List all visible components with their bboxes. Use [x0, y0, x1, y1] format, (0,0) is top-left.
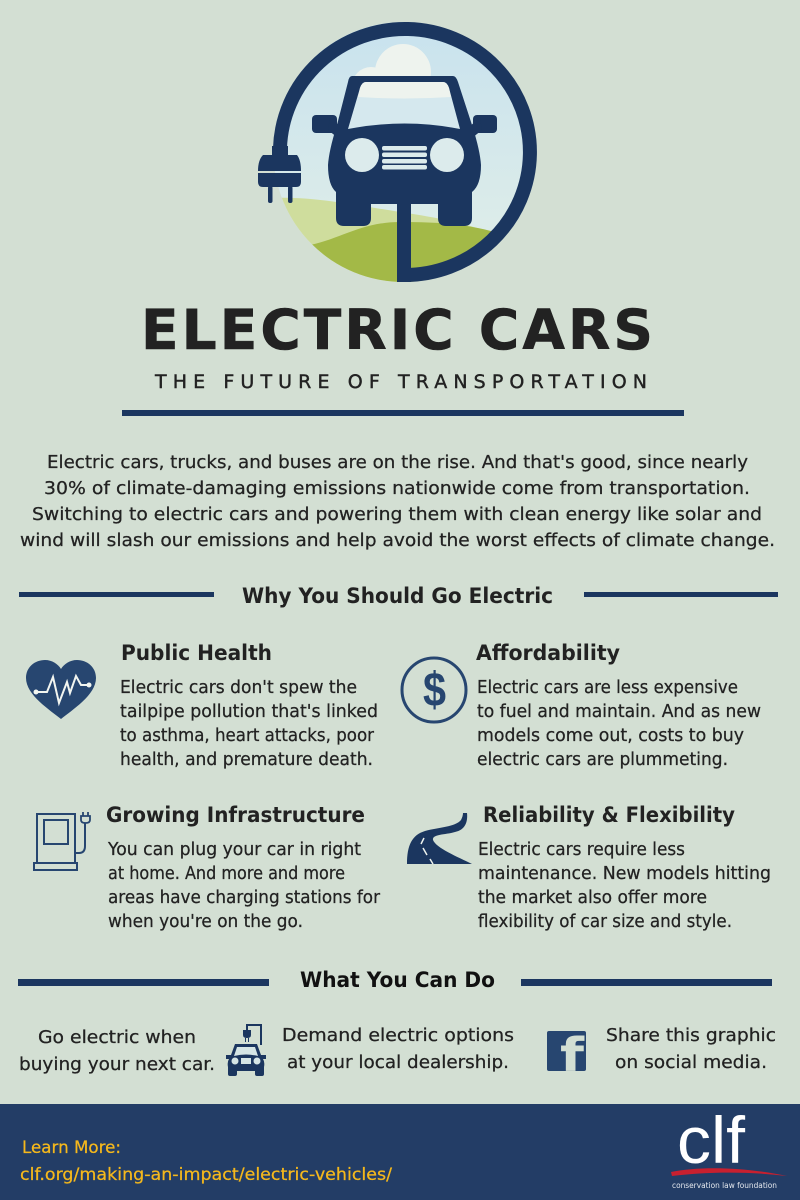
body text: models come out, costs to buy: [477, 726, 744, 746]
icon: car with charger: [226, 1025, 266, 1076]
link: clf.org/making-an-impact/electric-vehicles/: [20, 1165, 392, 1185]
action: share: Share this graphic: [606, 1026, 776, 1046]
intro paragraph: Switching to electric cars and powering them with clean energy like solar and: [32, 504, 762, 525]
body text: [107, 840, 381, 932]
intro paragraph: Electric cars, trucks, and buses are on the rise. And that's good, since nearly: [47, 452, 748, 473]
footer: [0, 1103, 800, 1200]
icon: heart with pulse: [26, 660, 96, 719]
body text: [477, 678, 761, 770]
action: go electric: buying your next car.: [19, 1055, 215, 1075]
panel: public health: [26, 641, 378, 770]
body text: when you're on the go.: [108, 912, 303, 932]
panel: growing infrastructure: [34, 803, 381, 932]
subtitle: THE FUTURE OF TRANSPORTATION: [154, 371, 647, 393]
icon: charging station: [34, 812, 90, 870]
cloud: [355, 44, 431, 76]
plug: [258, 146, 301, 203]
panel: affordability: [402, 641, 761, 770]
heading: Public Health: [121, 641, 272, 665]
heading: why you should go electric: Why You Should Go Electric: [242, 584, 553, 608]
intro paragraph: 30% of climate-damaging emissions nationwide come from transportation.: [44, 478, 750, 499]
heading: what you can do: What You Can Do: [300, 968, 495, 992]
heading: Affordability: [476, 641, 620, 665]
heading: Reliability & Flexibility: [483, 803, 735, 827]
icon: winding road: [407, 813, 472, 864]
body text: Electric cars require less: [478, 840, 685, 860]
learn more: Learn More:: [22, 1138, 121, 1158]
body text: the market also offer more: [478, 888, 707, 908]
icon: facebook: f: [560, 1028, 585, 1082]
icon: dollar in circle: [402, 658, 466, 722]
body text: electric cars are plummeting.: [477, 750, 728, 770]
body text: tailpipe pollution that's linked: [120, 702, 378, 722]
body text: flexibility of car size and style.: [478, 912, 732, 932]
body text: health, and premature death.: [120, 750, 373, 770]
action: share: on social media.: [615, 1053, 767, 1073]
body text: to fuel and maintain. And as new: [477, 702, 761, 722]
body text: [120, 678, 378, 770]
icon: facebook: [547, 1028, 586, 1082]
body text: Electric cars are less expensive: [477, 678, 738, 698]
action: go electric: [19, 1028, 215, 1075]
intro paragraph: wind will slash our emissions and help avoid the worst effects of climate change.: [20, 530, 775, 551]
clf logo: conservation law foundation: [672, 1181, 777, 1190]
action: go electric: Go electric when: [38, 1028, 196, 1048]
clf logo: clf: [677, 1103, 746, 1177]
action: demand electric options: at your local dealership.: [287, 1053, 509, 1073]
icon: dollar in circle: $: [423, 664, 446, 717]
action: demand electric options: Demand electric options: [282, 1026, 514, 1046]
body text: Electric cars don't spew the: [120, 678, 357, 698]
heading: Growing Infrastructure: [106, 803, 365, 827]
intro paragraph: [20, 452, 775, 551]
body text: at home. And more and more: [108, 864, 345, 884]
body text: to asthma, heart attacks, poor: [120, 726, 375, 746]
body text: maintenance. New models hitting: [478, 864, 771, 884]
body text: areas have charging stations for: [108, 888, 381, 908]
logo: electric car in circle: [258, 20, 540, 290]
panel: reliability and flexibility: [407, 803, 771, 932]
clf logo: [671, 1103, 787, 1190]
cord ring: [280, 29, 530, 275]
title: ELECTRIC CARS: [141, 298, 653, 362]
body text: [478, 840, 771, 932]
action: demand electric options: [282, 1026, 514, 1073]
car: [312, 76, 497, 226]
body text: You can plug your car in right: [107, 840, 361, 860]
action: share: [606, 1026, 776, 1073]
